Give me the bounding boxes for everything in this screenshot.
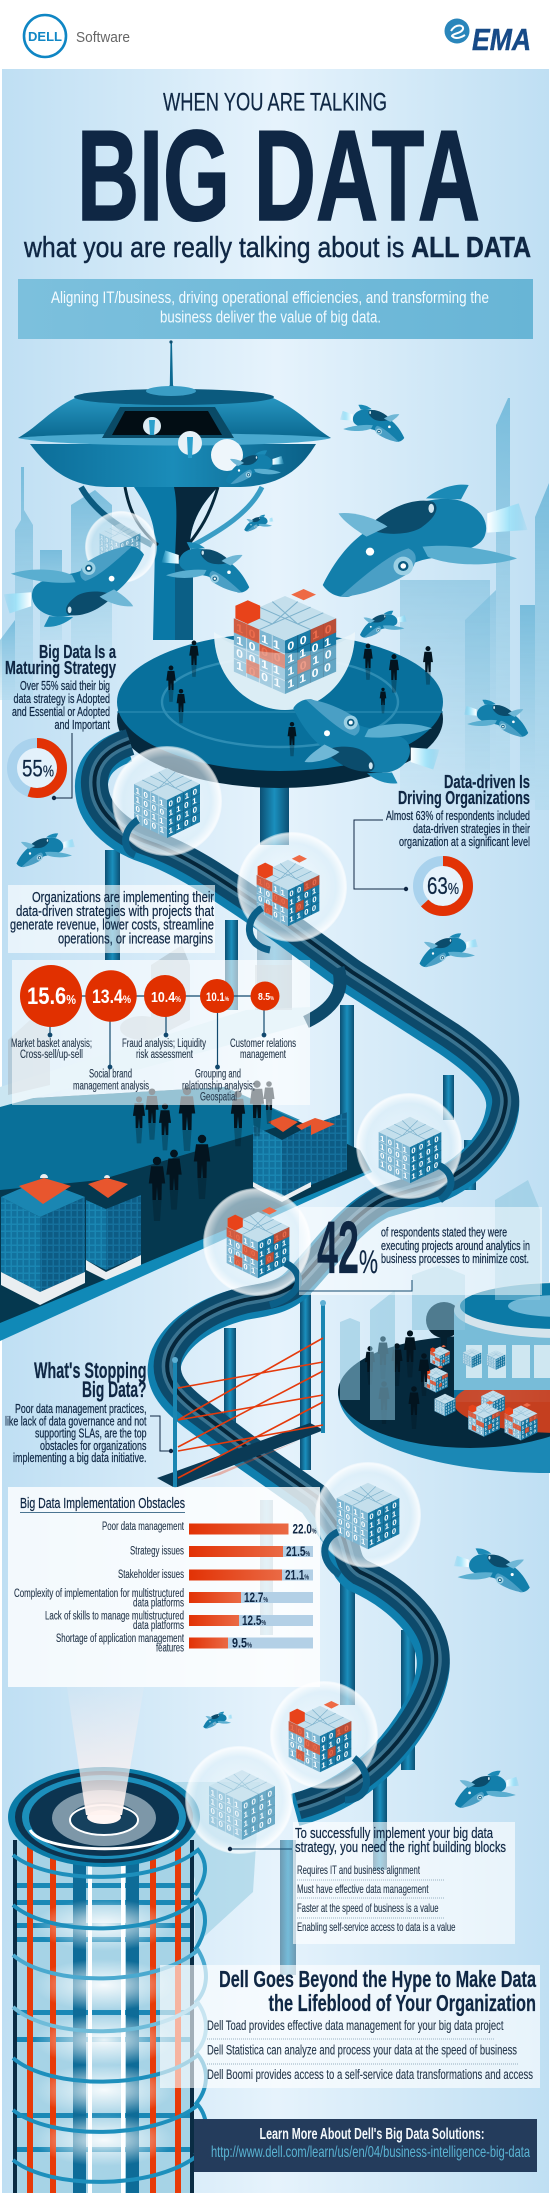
ship large right (323, 485, 528, 597)
bar values (232, 1522, 317, 1650)
panel: data-driven projects: data-driven strategies with projects that (16, 904, 214, 920)
panel: building blocks: Requires IT and business alignment (297, 1863, 420, 1877)
logo: EMA (444, 18, 531, 57)
sphere 5 (315, 1462, 421, 1575)
section: What's Stopping Big Data: Big Data? (82, 1377, 146, 1402)
project labels: Grouping and (195, 1068, 241, 1080)
donut 63%: 63% (427, 873, 459, 900)
bar labels: Poor data management (102, 1521, 185, 1533)
stat 13.4%: 13.4% (92, 987, 131, 1008)
skyline: background towers (0, 398, 549, 810)
data spheres along the road (112, 746, 462, 1854)
pale city behind 42% panel (340, 1180, 540, 1420)
bar labels: data platforms (133, 1598, 184, 1610)
bar labels: Lack of skills to manage multistructured (45, 1610, 184, 1622)
section: Big Data Is a Maturing Strategy: data strategy is Adopted (14, 692, 110, 706)
panel: building blocks: Enabling self-service access to data is a value (297, 1920, 456, 1934)
ship docking (162, 542, 249, 593)
panel: building blocks (228, 1822, 515, 1944)
ship top right (340, 405, 404, 442)
section: What's Stopping Big Data: What's Stopping (34, 1358, 146, 1383)
call to action (194, 2119, 537, 2172)
top central platform (117, 633, 443, 788)
stat 10.1%: 10.1% (206, 990, 230, 1004)
panel: building blocks: Must have effective data management (297, 1882, 429, 1896)
section: What's Stopping Big Data: like lack of data governance and not (5, 1414, 147, 1428)
sphere 4 (203, 1188, 311, 1305)
ship at saucer (226, 450, 284, 484)
stat 8.5% (250, 982, 280, 1010)
section: What's Stopping Big Data: implementing a big data initiative. (13, 1450, 146, 1465)
bar labels: features (156, 1642, 184, 1654)
donut 55% (12, 743, 62, 793)
section: Data-driven Is Driving Organizations (354, 771, 530, 911)
intro banner (18, 279, 533, 339)
project labels: Customer relations (230, 1038, 296, 1050)
section: Big Data Is a Maturing Strategy: and Important (54, 718, 110, 732)
ships (4, 405, 530, 1808)
logo: Dell Software: Software (76, 30, 130, 46)
bar values: 12.7% (244, 1590, 269, 1605)
laser fence (157, 1300, 326, 1488)
project labels: risk assessment (136, 1049, 194, 1061)
road ribbon (91, 742, 506, 1810)
control tower saucer (18, 340, 331, 640)
building 2 (86, 1175, 141, 1280)
panel: obstacles bar chart (8, 1487, 320, 1687)
bar values: 22.0% (292, 1522, 317, 1536)
project labels: management (240, 1049, 287, 1061)
section: Big Data Is a Maturing Strategy: Over 55% said their big (20, 679, 110, 693)
bar labels: Complexity of implementation for multistructured (14, 1588, 184, 1600)
right data-center disc (338, 1282, 550, 1473)
panel: project percentages (11, 960, 310, 1105)
project labels: Social brand (89, 1068, 132, 1080)
panel: 42 percent stat: % (359, 1244, 378, 1280)
building 1 (1, 1174, 85, 1305)
stat 15.6%: 15.6% (27, 983, 76, 1010)
panel: Dell goes beyond the hype (160, 1965, 540, 2088)
title block: what you are really talking about is ALL DATA (23, 232, 531, 264)
bar tracks (189, 1546, 313, 1648)
panel: data-driven projects: Organizations are implementing their (32, 890, 214, 906)
sphere 7 (185, 1746, 293, 1854)
section: Big Data Is a Maturing Strategy: Big Data Is a (39, 641, 116, 662)
stat 10.1% (200, 979, 234, 1013)
sphere 6 (270, 1681, 378, 1800)
donut 63% (418, 861, 468, 911)
stat 10.4% (144, 975, 186, 1017)
panel: data-driven projects: generate revenue, lower costs, streamline (10, 918, 214, 934)
project labels: Market basket analysis; (11, 1038, 92, 1050)
building 4 (296, 1112, 347, 1185)
project labels: Geospatial (200, 1092, 237, 1104)
section: What's Stopping Big Data: Poor data management practices, (15, 1401, 146, 1416)
sphere 3 (356, 1093, 462, 1200)
panel: 42 percent stat (299, 1206, 542, 1295)
panel: 42 percent stat: 42 (317, 1206, 359, 1289)
glass hemisphere with main data cube (214, 589, 355, 710)
panel: obstacles bar chart: Big Data Implementation Obstacles (20, 1495, 185, 1512)
logo: Dell Software: DELL (28, 29, 62, 44)
intro banner: business deliver the value of big data. (160, 308, 381, 326)
project labels (11, 1038, 296, 1104)
bar labels: data platforms (133, 1620, 184, 1632)
sphere 2 (237, 832, 347, 950)
glass bridge to tower (170, 1782, 260, 1945)
bar values: 9.5% (232, 1636, 253, 1650)
donut 55%: 55% (22, 756, 54, 782)
panel: data-driven projects: operations, or increase margins (58, 932, 213, 948)
panel: building blocks: Faster at the speed of business is a value (297, 1901, 439, 1915)
project labels: management analysis (73, 1080, 149, 1092)
bar values: 21.5% (286, 1544, 311, 1559)
panel: data-driven projects (8, 885, 215, 953)
building 3 (253, 1116, 311, 1202)
project labels: relationship analysis; (182, 1080, 255, 1092)
bar values: 21.1% (285, 1568, 310, 1582)
section: Big Data Is a Maturing Strategy (5, 641, 116, 800)
spiral data tower (8, 1687, 206, 2193)
tower light beam (67, 1687, 144, 1815)
ship large left (4, 546, 144, 627)
stat 13.4% (85, 970, 137, 1022)
section: Big Data Is a Maturing Strategy: Maturing Strategy (5, 657, 116, 678)
stat 8.5%: 8.5% (258, 992, 274, 1003)
crowd silhouettes (133, 1081, 274, 1221)
bar labels: Stakeholder issues (118, 1569, 184, 1581)
title block: WHEN YOU ARE TALKING (163, 88, 387, 116)
support pillars (105, 785, 476, 1975)
platform crowd (166, 641, 433, 756)
visitors (365, 1330, 430, 1429)
stat 10.4%: 10.4% (151, 989, 181, 1006)
logo: Dell Software (24, 15, 130, 57)
section: What's Stopping Big Data (5, 1358, 173, 1465)
project labels: Fraud analysis; Liquidity (122, 1038, 206, 1050)
bar labels: Strategy issues (130, 1546, 184, 1558)
ship on platform (293, 699, 440, 784)
project labels: Cross-sell/up-sell (20, 1049, 83, 1061)
section: What's Stopping Big Data: obstacles for organizations (40, 1438, 147, 1453)
logo: EMA: EMA (472, 22, 531, 57)
city deck with buildings and crowd (0, 968, 372, 1341)
bars (189, 1524, 288, 1648)
stored data cubes (424, 1345, 538, 1441)
stat 15.6% (20, 965, 82, 1027)
sphere 1 (112, 746, 222, 856)
bar labels (14, 1521, 185, 1654)
section: Big Data Is a Maturing Strategy: and Essential or Adopted (12, 705, 110, 719)
bar labels: Shortage of application management (56, 1633, 185, 1645)
section: What's Stopping Big Data: supporting SLAs, are the top (35, 1426, 146, 1440)
tower rooftop rings (8, 1767, 200, 1867)
ghost city behind project panel (8, 945, 292, 1095)
bar values: 12.5% (242, 1613, 267, 1628)
